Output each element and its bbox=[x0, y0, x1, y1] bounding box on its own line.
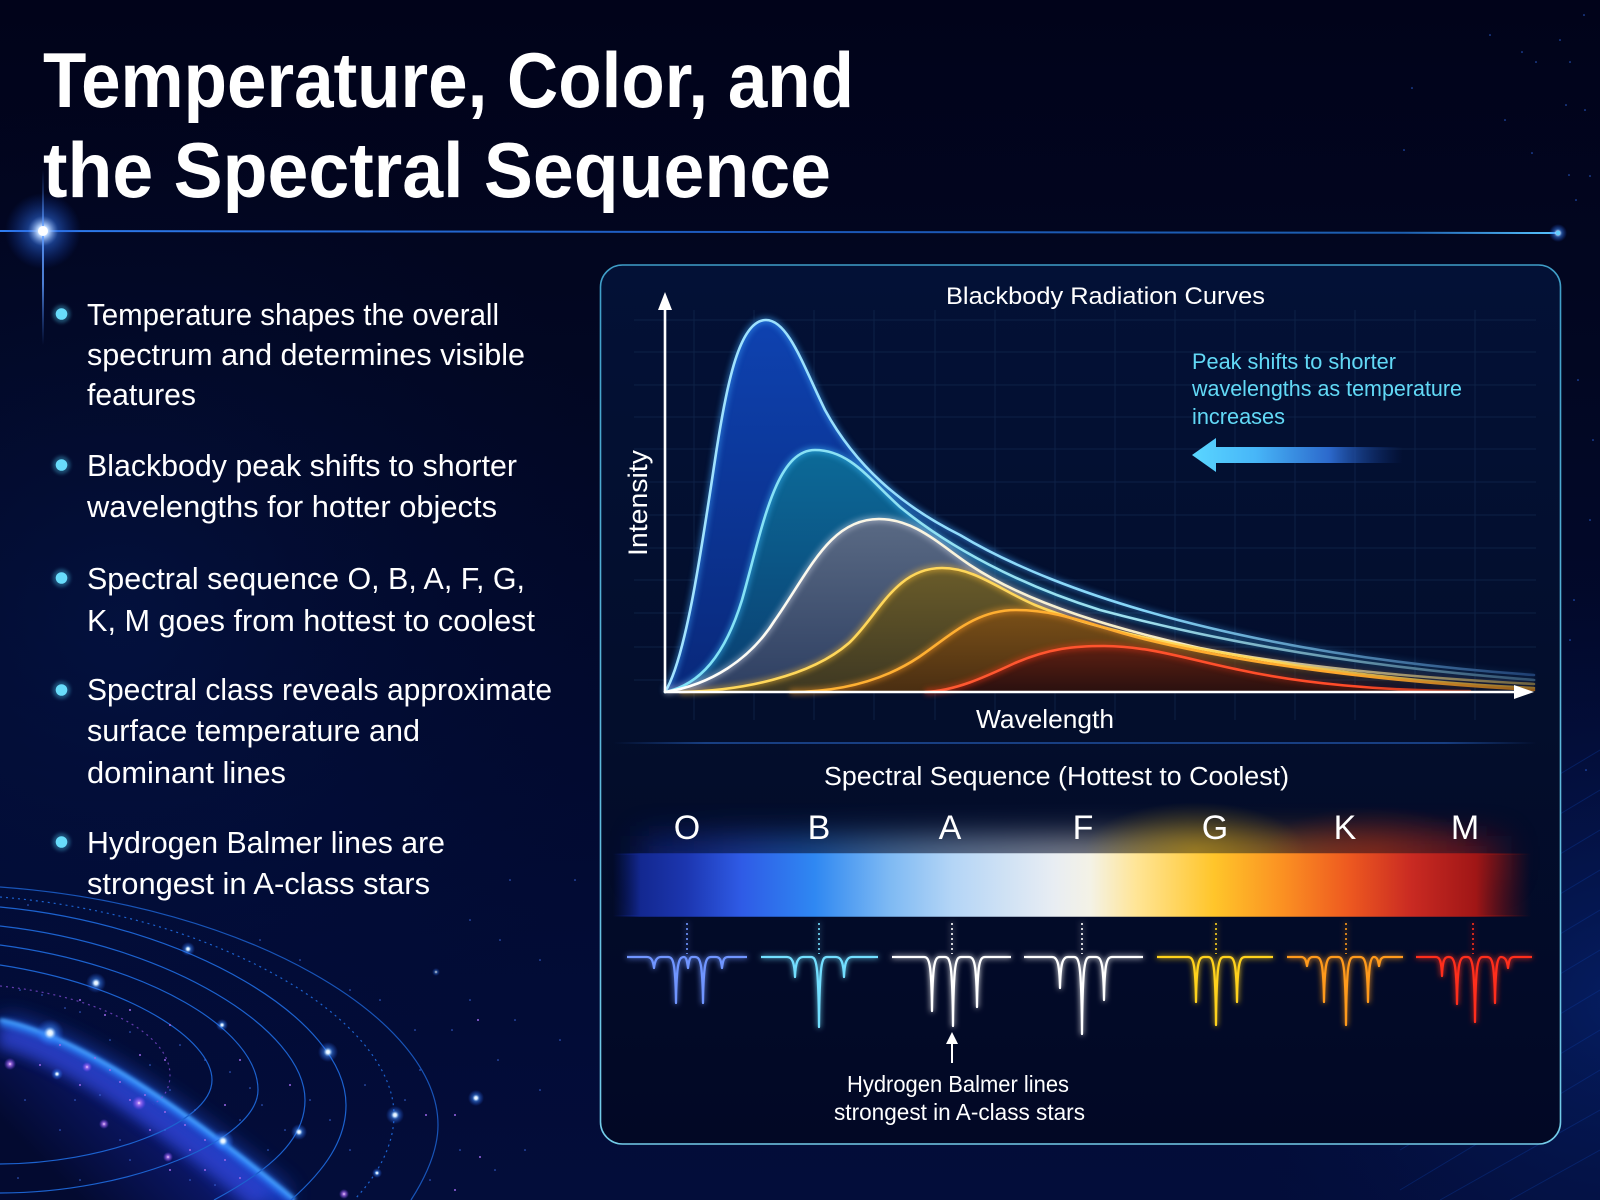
planet arc bbox=[0, 1020, 295, 1200]
class letters: M bbox=[1451, 809, 1479, 847]
absorption line spectra bbox=[627, 923, 1532, 1034]
bullet 2: wavelengths for hotter objects bbox=[86, 489, 497, 524]
title bbox=[43, 36, 854, 214]
spectrum G bbox=[1157, 923, 1273, 1025]
class letters: K bbox=[1334, 809, 1357, 847]
orbit rings bbox=[0, 887, 438, 1200]
class letters: O bbox=[674, 809, 700, 847]
spectrum O bbox=[627, 923, 747, 1003]
chart axes bbox=[658, 292, 1534, 699]
callout: peak shift bbox=[1191, 349, 1462, 429]
bullet 3: K, M goes from hottest to coolest bbox=[87, 603, 535, 638]
bullet 4 bbox=[52, 672, 552, 790]
class letters: G bbox=[1202, 809, 1228, 847]
bullet 3 bbox=[52, 561, 535, 638]
callout: peak shift: increases bbox=[1192, 404, 1285, 429]
bullet 1 bbox=[52, 297, 525, 412]
curve strokes bbox=[665, 320, 1534, 692]
decorative galaxy: planet limb, orbits and stars bbox=[0, 880, 575, 1200]
bullet 5: strongest in A-class stars bbox=[87, 866, 430, 901]
bullet 3: Spectral sequence O, B, A, F, G, bbox=[87, 561, 525, 596]
panel: charts bbox=[600, 265, 1560, 1144]
chart: blackbody radiation curves bbox=[623, 283, 1536, 734]
bright stars bbox=[4, 942, 484, 1199]
bullet 1: features bbox=[87, 377, 196, 412]
balmer annotation: Hydrogen Balmer lines bbox=[847, 1071, 1069, 1097]
curve glows bbox=[665, 320, 1534, 692]
bullet 2 bbox=[52, 448, 517, 524]
bullet 4: surface temperature and bbox=[87, 713, 420, 748]
callout: peak shift: Peak shifts to shorter bbox=[1192, 349, 1396, 374]
callout: peak shift: wavelengths as temperature bbox=[1191, 376, 1462, 401]
arrow: to A-class lines bbox=[946, 1032, 958, 1063]
class letters: A bbox=[939, 809, 962, 847]
bullet 4: Spectral class reveals approximate bbox=[87, 672, 552, 707]
spectrum M bbox=[1416, 923, 1532, 1022]
curve fills bbox=[668, 321, 1404, 691]
bullet 2: Blackbody peak shifts to shorter bbox=[87, 448, 517, 483]
spectrum K bbox=[1287, 923, 1403, 1025]
balmer annotation bbox=[834, 1071, 1085, 1125]
bullet list bbox=[52, 297, 552, 901]
title: the Spectral Sequence bbox=[43, 126, 831, 214]
balmer annotation: strongest in A-class stars bbox=[834, 1099, 1085, 1125]
bullet 5: Hydrogen Balmer lines are bbox=[87, 825, 445, 860]
spectrum bar bbox=[613, 854, 1538, 916]
spectrum A bbox=[892, 923, 1011, 1026]
chart grid bbox=[634, 310, 1536, 720]
arrow: peak shift direction bbox=[1192, 438, 1403, 472]
bullet 4: dominant lines bbox=[87, 755, 286, 790]
bullet 5 bbox=[52, 825, 445, 901]
x axis label: Wavelength bbox=[976, 704, 1114, 734]
sequence heading: Spectral Sequence (Hottest to Coolest) bbox=[824, 763, 1289, 791]
spectrum F bbox=[1024, 923, 1143, 1034]
class letters bbox=[674, 809, 1479, 847]
class letters: F bbox=[1073, 809, 1093, 847]
bullet 1: spectrum and determines visible bbox=[87, 337, 525, 372]
spectrum glow bbox=[640, 802, 1510, 898]
star dust bbox=[18, 880, 575, 1185]
spectral sequence bbox=[613, 763, 1538, 1125]
class letters: B bbox=[808, 809, 830, 847]
title: Temperature, Color, and bbox=[43, 36, 854, 124]
bullet 1: Temperature shapes the overall bbox=[87, 297, 499, 332]
chart title: Blackbody Radiation Curves bbox=[946, 283, 1265, 310]
spectrum B bbox=[761, 923, 878, 1027]
title divider line with star flare bbox=[0, 170, 1567, 345]
y axis label: Intensity bbox=[623, 449, 653, 556]
